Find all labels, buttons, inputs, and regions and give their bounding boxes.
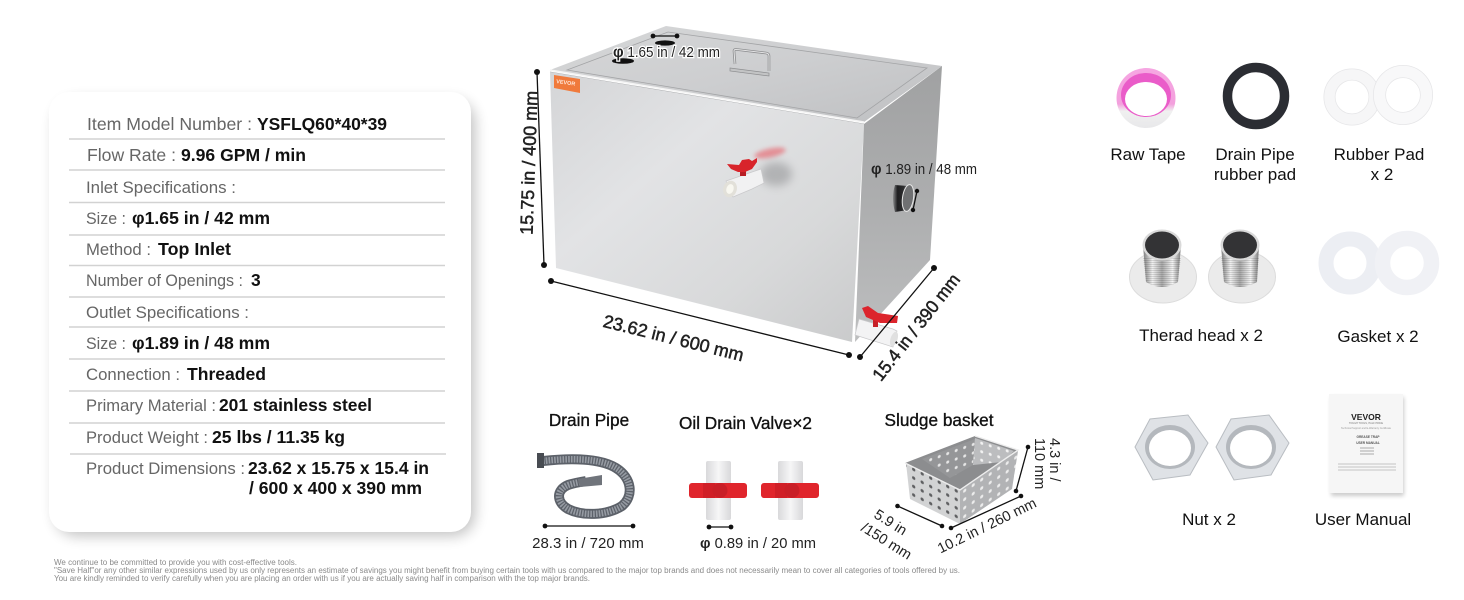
drain ball valve [855, 306, 900, 347]
depth dimension: 15.4 in / 390 mm [868, 270, 964, 385]
icon: manual booklet: USER MANUAL [1356, 441, 1380, 445]
spec: flow rate [87, 145, 306, 165]
dimension: basket length: 10.2 in / 260 mm [935, 496, 1039, 557]
spec: primary material: 201 stainless steel [219, 395, 372, 415]
dimension: basket width: /150 mm [858, 520, 914, 563]
spec: connection [86, 364, 266, 384]
tank lid [550, 26, 942, 124]
spec: flow rate: 9.96 GPM / min [181, 145, 306, 165]
accessory: drain pipe [532, 410, 644, 552]
accessory: nuts [1135, 415, 1289, 529]
spec: product dimensions: Product Dimensions : [86, 459, 245, 478]
width dimension: 23.62 in / 600 mm [601, 311, 746, 365]
blurred rear valve [753, 145, 792, 186]
spec: primary material: Primary Material : [86, 396, 216, 415]
dimension: basket height: 110 mm [1031, 438, 1047, 489]
label: drain pipe rubber pad: rubber pad [1214, 165, 1296, 184]
front ball valve [721, 158, 764, 199]
label: thread head: Therad head x 2 [1139, 326, 1263, 345]
spec: method: Method : [86, 240, 151, 259]
spec: product dimensions: / 600 x 400 x 390 mm [249, 478, 422, 498]
spec: product weight: Product Weight : [86, 428, 208, 447]
footnote disclaimer: We continue to be committed to provide you with cost-effective tools. [54, 558, 297, 567]
grease trap tank [516, 26, 977, 385]
icon: valve two [761, 461, 819, 520]
spec: flow rate: Flow Rate : [87, 145, 176, 165]
accessory: gaskets [1326, 238, 1432, 346]
inlet diameter callout [613, 34, 720, 61]
spec: inlet specifications heading: Inlet Specifications : [86, 178, 236, 197]
lid handle [730, 49, 769, 76]
spec: primary material [86, 395, 372, 415]
spec: method: Top Inlet [158, 239, 231, 259]
dimension: pipe length [532, 524, 644, 552]
icon: perforated basket [905, 436, 1018, 524]
footnote disclaimer [54, 558, 960, 583]
vevor label [554, 75, 580, 93]
outlet diameter callout: φ 1.89 in / 48 mm [871, 161, 977, 178]
spec: inlet size: φ1.65 in / 42 mm [132, 208, 270, 228]
icon: thread head one [1130, 230, 1196, 303]
icon: hex nut two [1216, 415, 1289, 480]
label: rubber pad: x 2 [1371, 165, 1393, 184]
accessory: drain pipe rubber pad [1214, 68, 1296, 184]
dimension: basket width [858, 504, 944, 563]
spec: product dimensions: 23.62 x 15.75 x 15.4 in [248, 458, 429, 478]
accessory: sludge basket [858, 410, 1062, 563]
accessory: raw tape [1110, 68, 1186, 164]
accessory: rubber pads [1330, 72, 1426, 184]
accessory: oil drain valves [679, 413, 819, 552]
vevor label: VEVOR [556, 79, 576, 88]
tank front face [550, 72, 864, 342]
icon: black rubber ring [1228, 68, 1284, 124]
spec: number of openings: Number of Openings : [86, 271, 243, 290]
icon: manual booklet: Technical Support and E-Warranty Certificate [1341, 427, 1392, 430]
heading: sludge basket: Sludge basket [885, 410, 994, 430]
heading: drain pipe: Drain Pipe [549, 410, 629, 430]
label: user manual: User Manual [1315, 510, 1411, 529]
tank right face [855, 66, 942, 342]
spec: inlet size: Size : [86, 209, 126, 228]
spec: product weight [86, 427, 345, 447]
spec: item model number: Item Model Number : [87, 114, 252, 134]
footnote disclaimer: "Save Half"or any other similar expressions used by us only represents an estimate of savings you might benefit from buying certain tools with us compared to the major top brands and does not necessarily mean to cover all categories of tools offered by us. [54, 566, 960, 575]
label: raw tape: Raw Tape [1110, 145, 1186, 164]
dimension: basket width: 5.9 in [871, 507, 909, 539]
heading: oil drain valve: Oil Drain Valve×2 [679, 413, 812, 433]
label: gasket: Gasket x 2 [1337, 327, 1419, 346]
accessory: thread heads [1130, 230, 1276, 345]
spec: outlet size: Size : [86, 334, 126, 353]
icon: manual booklet [1329, 394, 1404, 496]
footnote disclaimer: You are kindly reminded to verify carefully when you are placing an order with us if you are actually saving half in comparison with the top major brands. [54, 574, 590, 583]
height dimension [516, 69, 547, 268]
dimension: valve diameter: φ 0.89 in / 20 mm [700, 535, 816, 552]
panel: product specifications [49, 92, 475, 536]
icon: white rubber pads [1330, 72, 1426, 120]
outlet pipe [893, 184, 915, 212]
inlet diameter callout: φ 1.65 in / 42 mm [613, 44, 720, 61]
icon: manual booklet: GREASE TRAP [1356, 435, 1380, 439]
label: nut: Nut x 2 [1182, 510, 1236, 529]
label: rubber pad: Rubber Pad [1334, 145, 1424, 164]
spec: connection: Connection : [86, 365, 180, 384]
height dimension: 15.75 in / 400 mm [516, 90, 542, 235]
icon: valve one [689, 461, 747, 520]
spec: outlet size: φ1.89 in / 48 mm [132, 333, 270, 353]
spec: outlet specifications heading: Outlet Specifications : [86, 303, 249, 322]
icon: thread head two [1208, 230, 1276, 303]
dimension: basket height [1014, 438, 1062, 493]
spec: product dimensions [86, 458, 429, 498]
spec: connection: Threaded [187, 364, 266, 384]
icon: hex nut one [1135, 415, 1208, 480]
icon: gaskets [1326, 238, 1432, 288]
label: drain pipe rubber pad: Drain Pipe [1215, 145, 1295, 164]
accessory: user manual [1315, 394, 1411, 529]
dimension: pipe length: 28.3 in / 720 mm [532, 535, 644, 552]
icon: manual booklet: TOUGH TOOLS, HALF PRICE [1349, 422, 1383, 425]
icon: corrugated hose [537, 453, 630, 514]
outlet diameter callout [871, 161, 977, 212]
icon: manual booklet: VEVOR [1351, 412, 1381, 422]
width dimension [548, 278, 852, 365]
icon: tape roll [1116, 68, 1176, 128]
spec: product weight: 25 lbs / 11.35 kg [212, 427, 345, 447]
spec: item model number [87, 114, 387, 134]
spec: number of openings: 3 [251, 270, 261, 290]
spec: item model number: YSFLQ60*40*39 [257, 114, 387, 134]
dimension: basket height: 4.3 in / [1046, 438, 1062, 482]
spec: method [86, 239, 231, 259]
